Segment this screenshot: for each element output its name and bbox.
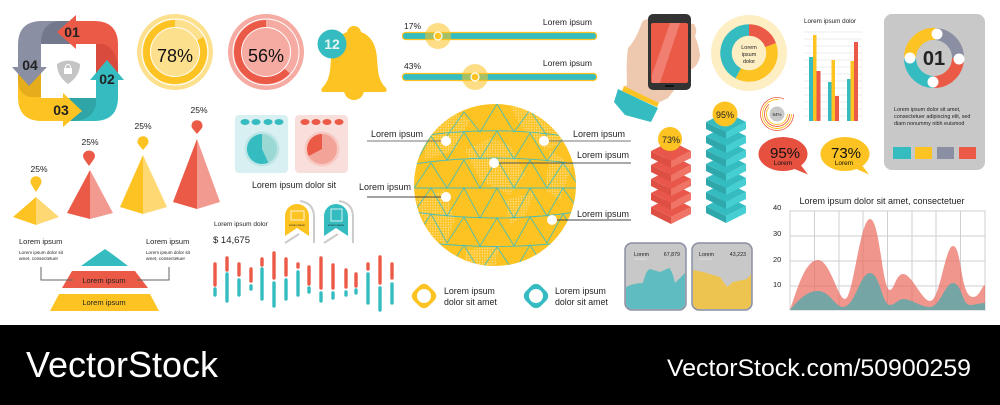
- number labels: 02: [99, 71, 115, 87]
- arrow head 02: [90, 60, 124, 80]
- globe callouts: [359, 129, 631, 225]
- stat: dollar amount: Lorem ipsum dolor: [214, 221, 269, 228]
- pyramid 3: 25%: [134, 121, 152, 131]
- globe map: [414, 104, 580, 272]
- callout: middle left: [359, 182, 451, 202]
- number labels: 04: [22, 57, 38, 73]
- icon: bell with badge: [318, 26, 387, 100]
- slider 17%: [402, 17, 596, 49]
- stat: dollar amount: $ 14,675: [213, 235, 250, 246]
- isometric stack teal: 95%: [716, 110, 734, 120]
- tiered pyramid with labels: Lorem ipsum: [82, 276, 126, 285]
- band: gray: [18, 21, 76, 70]
- mini card teal: Lorem: [634, 252, 650, 258]
- isometric stack red: 73%: [662, 135, 680, 145]
- area chart: [773, 196, 985, 310]
- axis labels: 10: [773, 280, 781, 289]
- panel text: consectetuer adipiscing elit, sed: [894, 114, 970, 120]
- isometric stack teal: [706, 102, 746, 223]
- arrow head 01: [57, 15, 76, 49]
- arrow head 03: [63, 93, 82, 127]
- bookmark tags: [285, 201, 353, 243]
- slider 43%: 43%: [404, 61, 421, 71]
- speech bubble 95%: 95%: [770, 145, 800, 162]
- gray info panel: 01: [923, 48, 945, 70]
- number labels: 03: [53, 102, 69, 118]
- callout: center right: Lorem ipsum: [577, 150, 629, 160]
- speech bubble 73%: 73%: [831, 145, 861, 162]
- right note: Lorem ipsum: [146, 237, 189, 246]
- callout: lower right: [547, 209, 631, 225]
- slider 17%: 17%: [404, 21, 421, 31]
- pyramid 3: [120, 121, 167, 214]
- footer band: [0, 325, 1000, 405]
- mini card yellow: [692, 243, 752, 310]
- hand holding phone: [614, 14, 700, 122]
- band: teal: [65, 78, 118, 121]
- number labels: [22, 24, 115, 118]
- right note: [146, 237, 191, 261]
- stat: dollar amount: [213, 221, 269, 246]
- donut chart: ipsum: [742, 52, 757, 58]
- slider 43%: [402, 58, 596, 90]
- legend: teal: [521, 281, 608, 311]
- pyramid 1: 25%: [30, 164, 48, 174]
- callout: top right: Lorem ipsum: [573, 129, 625, 139]
- callout: center right: [489, 150, 631, 168]
- legend: yellow: Lorem ipsum: [444, 286, 495, 296]
- left note: Lorem ipsum: [19, 237, 62, 246]
- callout: top left: Lorem ipsum: [371, 129, 423, 139]
- tiered pyramid with labels: [19, 237, 191, 311]
- left note: amet, consectetuer: [19, 256, 59, 261]
- right note: amet, consectetuer: [146, 256, 186, 261]
- axis labels: [773, 203, 781, 289]
- mini card yellow: 43,223: [730, 252, 746, 258]
- red area: [790, 219, 985, 310]
- left note: Lorem ipsum dolor sit: [19, 250, 64, 255]
- panel text: Lorem ipsum dolor sit amet,: [894, 107, 961, 113]
- speech bubble 95%: [758, 137, 808, 174]
- band: yellow: [18, 70, 70, 121]
- gauge 78%: [137, 14, 213, 90]
- band shading: [18, 21, 118, 121]
- slider 43%: Lorem ipsum: [543, 58, 592, 68]
- watermark logo: VectorStock: [26, 344, 219, 385]
- panel text: [894, 107, 970, 127]
- pyramid 4: 25%: [190, 105, 208, 115]
- watermark url: VectorStock.com/50900259: [667, 355, 971, 382]
- washer panels: [235, 115, 348, 190]
- donut chart: dolor: [743, 59, 755, 65]
- callout: top right: [539, 129, 631, 146]
- axis labels: 40: [773, 203, 781, 212]
- speech bubble 95%: Lorem: [774, 160, 792, 167]
- axis labels: 30: [773, 229, 781, 238]
- callout: top left: [367, 129, 451, 146]
- band: red: [76, 21, 118, 80]
- callout: lower right: Lorem ipsum: [577, 209, 629, 219]
- mini card yellow: Lorem: [699, 252, 715, 258]
- gauge 56%: [228, 14, 304, 90]
- icon: bell with badge: 12: [324, 36, 340, 52]
- bar chart: Lorem ipsum dolor: [804, 18, 856, 25]
- donut chart: [711, 15, 787, 91]
- pyramid 4: [173, 105, 220, 209]
- panel text: diam nonummy nibh euismod: [894, 121, 964, 127]
- segmented ring: [904, 28, 964, 88]
- axis labels: 20: [773, 255, 781, 264]
- right note: Lorem ipsum dolor sit: [146, 250, 191, 255]
- pyramid 2: 25%: [81, 137, 99, 147]
- washer panels: Lorem ipsum dolor sit: [252, 180, 337, 190]
- gray info panel: [884, 14, 985, 170]
- icon: shield lock: [57, 60, 80, 84]
- cycle arrows diagram: [12, 15, 124, 127]
- legend: teal: dolor sit amet: [555, 297, 608, 307]
- pyramid 1: [13, 164, 59, 225]
- bar wave chart: [215, 253, 392, 310]
- arrow head 04: [12, 67, 47, 86]
- teal area: [790, 273, 985, 310]
- concentric radial 54%: [760, 98, 794, 130]
- left note: [19, 237, 64, 261]
- mini card teal: 67,879: [664, 252, 680, 258]
- legend: yellow: [409, 281, 497, 311]
- concentric radial 54%: 54%: [772, 112, 782, 117]
- area chart: Lorem ipsum dolor sit amet, consectetuer: [799, 196, 965, 206]
- speech bubble 73%: [820, 137, 870, 174]
- number labels: 01: [64, 24, 80, 40]
- pyramid 2: [67, 137, 113, 219]
- bookmark tags: Lorem ipsum: [328, 223, 345, 227]
- donut chart: Lorem: [741, 45, 757, 51]
- mini card teal: [625, 243, 686, 310]
- gauge 78%: 78%: [157, 46, 193, 66]
- speech bubble 73%: Lorem: [835, 160, 853, 167]
- color swatches: [893, 147, 976, 159]
- slider 17%: Lorem ipsum: [543, 17, 592, 27]
- tiered pyramid with labels: Lorem ipsum: [82, 298, 126, 307]
- legend: teal: Lorem ipsum: [555, 286, 606, 296]
- gauge 56%: 56%: [248, 46, 284, 66]
- callout: middle left: Lorem ipsum: [359, 182, 411, 192]
- isometric stack red: [651, 127, 691, 224]
- legend: yellow: dolor sit amet: [444, 297, 497, 307]
- bookmark tags: Lorem ipsum: [289, 223, 306, 227]
- bar chart: [804, 18, 862, 121]
